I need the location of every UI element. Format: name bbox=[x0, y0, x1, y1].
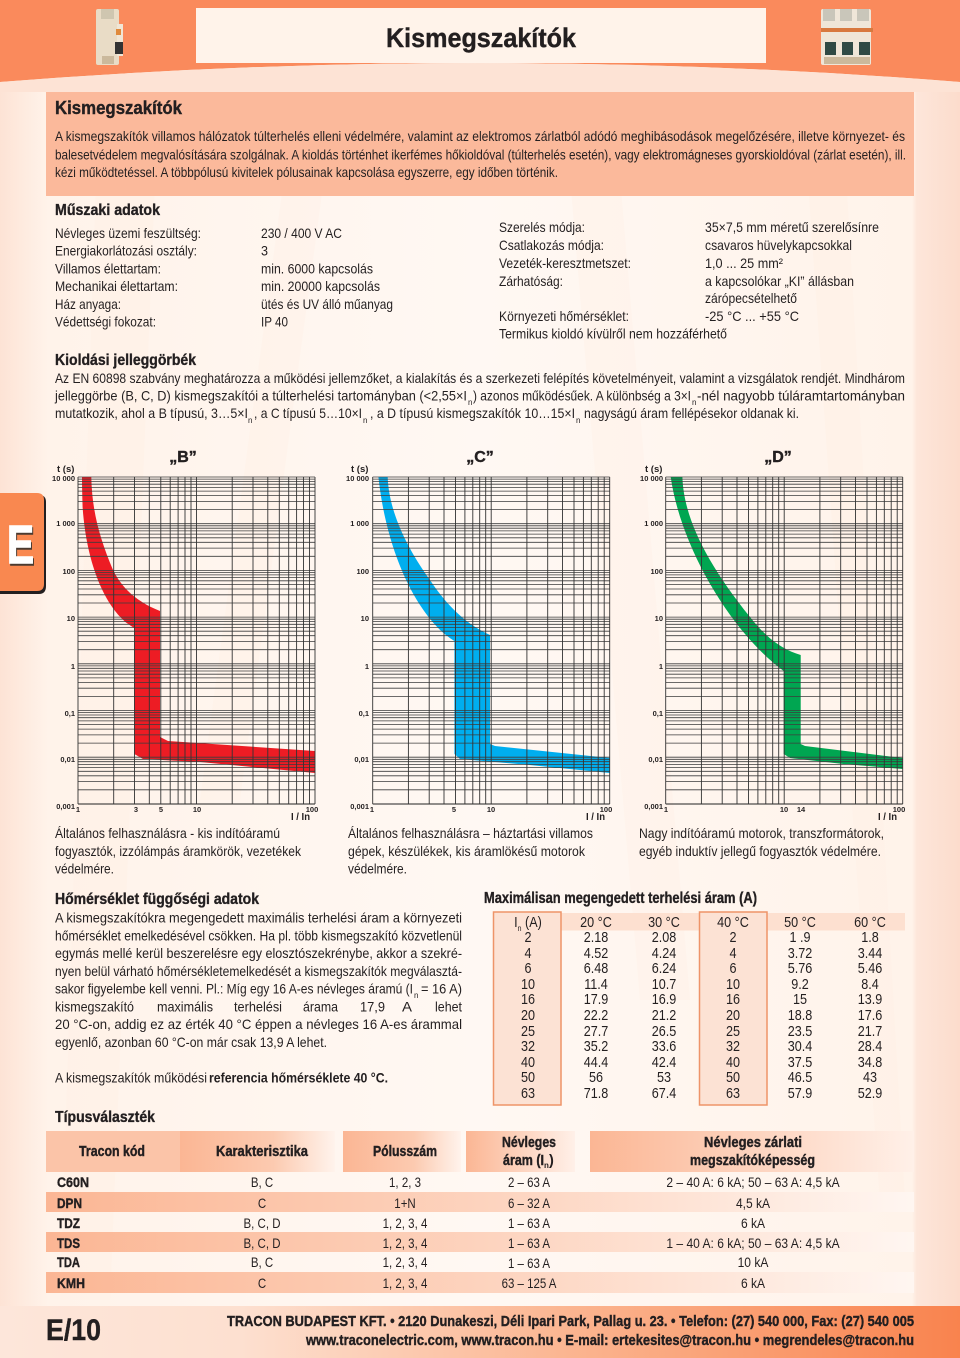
caption D bbox=[639, 825, 884, 859]
characteristic column: C bbox=[258, 1275, 266, 1291]
chart: C curve bbox=[346, 449, 612, 823]
chart: D curve: 14 bbox=[797, 805, 806, 814]
code column: TDZ bbox=[57, 1215, 80, 1231]
column 60 C: 13.9 bbox=[858, 991, 882, 1007]
column 30 C: 4.24 bbox=[652, 945, 677, 961]
caption C: Általános felhasználásra – háztartási villamos bbox=[348, 825, 593, 841]
breaking capacity column: 6 kA bbox=[741, 1275, 765, 1291]
column 40 C: 2 bbox=[729, 929, 737, 945]
column 40 C: 32 bbox=[726, 1038, 740, 1054]
column 20 C: 11.4 bbox=[584, 976, 608, 992]
column 60 C: 5.46 bbox=[858, 960, 882, 976]
column 50 C: 9.2 bbox=[791, 976, 809, 992]
column 40 C: 40 °C bbox=[717, 914, 749, 930]
column 20 C: 71.8 bbox=[584, 1085, 608, 1101]
technical data right: a kapcsolókar „KI” állásban bbox=[705, 273, 854, 289]
chart: C curve: 0,001 bbox=[350, 802, 369, 811]
table: type selection bbox=[46, 1131, 914, 1293]
rated current column: 6 – 32 A bbox=[508, 1195, 550, 1211]
temperature text: kismegszakító bbox=[55, 998, 134, 1014]
reference temperature note: A kismegszakítók működési bbox=[55, 1070, 207, 1086]
chart: C curve: 1 000 bbox=[350, 519, 369, 528]
technical data left: ütés és UV álló műanyag bbox=[261, 296, 393, 312]
table header: áram (I bbox=[503, 1153, 544, 1169]
column 50 C: 57.9 bbox=[788, 1085, 812, 1101]
caption B: védelmére. bbox=[55, 860, 114, 876]
column 60 C: 43 bbox=[863, 1069, 877, 1085]
trip curves text: -nél nagyobb túláramtartományban bbox=[697, 388, 905, 404]
breaking capacity column: 1 – 40 A: 6 kA; 50 – 63 A: 4,5 kA bbox=[666, 1235, 840, 1251]
heading: trip curves: Kioldási jelleggörbék bbox=[55, 352, 196, 369]
column In: 25 bbox=[521, 1023, 535, 1039]
heading: max load table: Maximálisan megengedett terhelési áram (A) bbox=[484, 890, 757, 907]
column 40 C: 4 bbox=[729, 945, 737, 961]
technical data left: Ház anyaga: bbox=[55, 296, 121, 312]
heading: temperature data: Hőmérséklet függőségi adatok bbox=[55, 891, 259, 908]
column 20 C: 35.2 bbox=[584, 1038, 608, 1054]
code column: DPN bbox=[57, 1195, 82, 1211]
pole column bbox=[383, 1174, 427, 1291]
icon: three pole breaker bbox=[821, 9, 873, 65]
technical data right: zárópecsételhető bbox=[705, 290, 797, 306]
characteristic column bbox=[244, 1174, 280, 1291]
red trip band bbox=[82, 477, 315, 773]
pole column: 1, 2, 3 bbox=[389, 1174, 421, 1190]
column 40 C: 16 bbox=[726, 991, 740, 1007]
chart: D curve bbox=[640, 449, 905, 823]
technical data left: Mechanikai élettartam: bbox=[55, 278, 178, 294]
chart title C: „C” bbox=[466, 449, 494, 466]
column 50 C: 18.8 bbox=[788, 1007, 812, 1023]
column 60 C: 3.44 bbox=[858, 945, 883, 961]
column 20 C: 20 °C bbox=[580, 914, 612, 930]
caption D: Nagy indítóáramú motorok, transzformátorok, bbox=[639, 825, 884, 841]
column In: I bbox=[514, 914, 518, 930]
column In: 6 bbox=[524, 960, 532, 976]
table header: megszakítóképesség bbox=[690, 1153, 815, 1169]
column 60 C: 28.4 bbox=[858, 1038, 883, 1054]
reference temperature note bbox=[55, 1070, 388, 1086]
chart: D curve: 100 bbox=[650, 567, 663, 576]
temperature text bbox=[55, 910, 462, 1050]
breaking capacity column bbox=[666, 1174, 840, 1291]
temperature text: n bbox=[414, 991, 418, 1000]
technical data left: Névleges üzemi feszültség: bbox=[55, 225, 201, 241]
column 30 C: 2.08 bbox=[652, 929, 676, 945]
introduction text bbox=[55, 128, 906, 180]
caption C: gépek, készülékek, kis áramlökésű motorok bbox=[348, 843, 586, 859]
chart: B curve: 5 bbox=[159, 805, 163, 814]
rated current column: 63 – 125 A bbox=[502, 1275, 557, 1291]
temperature text: sakor figyelembe kell venni. Pl.: Míg egy 16 A-es névleges áramú (I bbox=[55, 980, 413, 996]
technical data right: Környezeti hőmérséklet: bbox=[499, 308, 629, 324]
chart: B curve: 100 bbox=[62, 567, 75, 576]
chart: D curve: I / In bbox=[878, 812, 897, 823]
technical data left: IP 40 bbox=[261, 314, 288, 330]
column 20 C: 4.52 bbox=[584, 945, 608, 961]
rated current column: 1 – 63 A bbox=[508, 1215, 550, 1231]
column 60 C: 8.4 bbox=[861, 976, 879, 992]
green trip band bbox=[671, 477, 903, 769]
chart: B curve bbox=[52, 449, 318, 823]
column 30 C: 16.9 bbox=[652, 991, 676, 1007]
column 50 C: 50 °C bbox=[784, 914, 816, 930]
rated current column: 1 – 63 A bbox=[508, 1255, 550, 1271]
temperature text: A bbox=[402, 998, 413, 1014]
trip curves text: n bbox=[363, 416, 367, 425]
chart: D curve: 0,001 bbox=[644, 802, 663, 811]
chart: D curve: 1 bbox=[659, 662, 663, 671]
column In bbox=[514, 914, 542, 1101]
chart: C curve: 0,1 bbox=[359, 709, 369, 718]
chart: C curve: 100 bbox=[600, 805, 612, 814]
table header: Névleges zárlati bbox=[704, 1135, 802, 1151]
chart title B: „B” bbox=[169, 449, 197, 466]
technical data right: Zárhatóság: bbox=[499, 273, 563, 289]
technical data right: Termikus kioldó kívülről nem hozzáférhető bbox=[499, 326, 727, 342]
temperature text: árama bbox=[303, 998, 338, 1014]
footer contact text bbox=[227, 1314, 914, 1349]
temperature text: = 16 A) bbox=[421, 980, 462, 996]
column 30 C: 42.4 bbox=[652, 1054, 677, 1070]
characteristic column: B, C, D bbox=[244, 1215, 280, 1231]
temperature text: 17,9 bbox=[360, 998, 385, 1014]
column 40 C: 63 bbox=[726, 1085, 740, 1101]
icon: section tab E bbox=[0, 493, 46, 594]
chart title D: „D” bbox=[764, 449, 792, 466]
title: Kismegszakítók bbox=[386, 23, 577, 53]
pole column: 1, 2, 3, 4 bbox=[383, 1275, 427, 1291]
technical data left: Védettségi fokozat: bbox=[55, 314, 156, 330]
reference temperature note: referencia hőmérséklete 40 °C. bbox=[209, 1070, 388, 1086]
heading: type selection: Típusválaszték bbox=[55, 1109, 155, 1126]
column 50 C: 5.76 bbox=[788, 960, 812, 976]
technical data right: Szerelés módja: bbox=[499, 219, 585, 235]
column 20 C bbox=[580, 914, 612, 1101]
chart: D curve: 10 bbox=[780, 805, 788, 814]
temperature text: A kismegszakítókra megengedett maximális terhelési áram a környezeti bbox=[55, 910, 462, 926]
icon: single pole breaker bbox=[96, 9, 123, 65]
column 40 C bbox=[717, 914, 749, 1101]
chart: C curve: 1 bbox=[365, 662, 369, 671]
column 50 C: 37.5 bbox=[788, 1054, 812, 1070]
chart: C curve: 0,01 bbox=[354, 755, 369, 764]
chart: D curve: 0,1 bbox=[653, 709, 663, 718]
column In: n bbox=[518, 924, 522, 933]
blue trip band bbox=[378, 477, 610, 773]
column 40 C: 50 bbox=[726, 1069, 740, 1085]
column 20 C: 17.9 bbox=[584, 991, 608, 1007]
column 40 C: 20 bbox=[726, 1007, 740, 1023]
caption D: egyéb induktív jellegű fogyasztók védelmére. bbox=[639, 843, 881, 859]
table header: n bbox=[544, 1161, 549, 1170]
temperature text: egyenlő, azonban 60 °C-on már csak 13,9 A lehet. bbox=[55, 1034, 327, 1050]
column 20 C: 27.7 bbox=[584, 1023, 608, 1039]
characteristic column: B, C, D bbox=[244, 1235, 280, 1251]
technical data right: csavaros hüvelykapcsokkal bbox=[705, 237, 852, 253]
rated current column: 2 – 63 A bbox=[508, 1174, 550, 1190]
footer band bbox=[0, 1306, 960, 1358]
caption C bbox=[348, 825, 593, 876]
heading: technical data: Műszaki adatok bbox=[55, 202, 160, 219]
icon: section tab E: E bbox=[7, 515, 34, 575]
chart: B curve: 0,001 bbox=[56, 802, 75, 811]
column 30 C: 26.5 bbox=[652, 1023, 676, 1039]
trip curves text: ) azonos működésűek. A különbség a 3×I bbox=[473, 388, 691, 404]
column In: 32 bbox=[521, 1038, 535, 1054]
characteristic column: B, C bbox=[251, 1254, 273, 1270]
chart: C curve: 10 bbox=[487, 805, 495, 814]
column 30 C: 33.6 bbox=[652, 1038, 676, 1054]
technical data left: 230 / 400 V AC bbox=[261, 225, 342, 241]
chart: C curve: t (s) bbox=[351, 464, 368, 475]
chart: D curve: 0,01 bbox=[648, 755, 663, 764]
chart: B curve: 10 bbox=[67, 614, 75, 623]
trip curves text: n bbox=[468, 398, 472, 407]
chart: B curve: 3 bbox=[134, 805, 138, 814]
caption C: védelmére. bbox=[348, 860, 407, 876]
trip curves text: nagyságú áram fellépésekor oldanak ki. bbox=[584, 405, 799, 421]
table header: Névleges bbox=[502, 1135, 556, 1151]
rated current column: 1 – 63 A bbox=[508, 1235, 550, 1251]
column In: 4 bbox=[524, 945, 532, 961]
trip curves text: n bbox=[692, 398, 696, 407]
trip curves text bbox=[54, 370, 905, 425]
column 50 C: 3.72 bbox=[788, 945, 812, 961]
technical data right: 35×7,5 mm méretű szerelősínre bbox=[705, 219, 879, 235]
column In: 63 bbox=[521, 1085, 535, 1101]
chart: D curve: 1 bbox=[664, 805, 668, 814]
chart: B curve: 0,1 bbox=[65, 709, 75, 718]
column 30 C: 53 bbox=[657, 1069, 671, 1085]
chart: D curve: 100 bbox=[893, 805, 905, 814]
caption B: Általános felhasználásra - kis indítóáramú bbox=[55, 825, 280, 841]
temperature text: 20 °C-on, addig ez az érték 40 °C éppen a névleges 16 A-es árammal bbox=[55, 1016, 462, 1032]
column 50 C: 15 bbox=[793, 991, 807, 1007]
table header bbox=[46, 1131, 914, 1172]
chart: C curve: 10 000 bbox=[346, 474, 369, 483]
chart: D curve: 10 000 bbox=[640, 474, 663, 483]
chart: B curve: 1 000 bbox=[56, 519, 75, 528]
caption B bbox=[55, 825, 302, 876]
pole column: 1+N bbox=[394, 1195, 416, 1211]
technical data right: -25 °C ... +55 °C bbox=[705, 308, 799, 324]
pole column: 1, 2, 3, 4 bbox=[383, 1215, 427, 1231]
column 60 C: 34.8 bbox=[858, 1054, 882, 1070]
breaking capacity column: 6 kA bbox=[741, 1215, 765, 1231]
chart: B curve: 0,01 bbox=[60, 755, 75, 764]
introduction text: kézi működtetéssel. A többpólusú kivitelek pólusainak kapcsolása egyszerre, egy időben történik. bbox=[55, 164, 558, 180]
chart: B curve: I / In bbox=[291, 812, 310, 823]
column 60 C bbox=[854, 914, 886, 1101]
column 30 C: 30 °C bbox=[648, 914, 680, 930]
column 50 C: 1 .9 bbox=[789, 929, 811, 945]
breaking capacity column: 2 – 40 A: 6 kA; 50 – 63 A: 4,5 kA bbox=[666, 1174, 840, 1190]
column 60 C: 60 °C bbox=[854, 914, 886, 930]
trip curves text: , a C típusú 5…10×I bbox=[254, 405, 362, 421]
chart: B curve: 1 bbox=[76, 805, 80, 814]
technical data left: 3 bbox=[261, 242, 268, 258]
column 40 C: 40 bbox=[726, 1054, 740, 1070]
column 30 C: 67.4 bbox=[652, 1085, 677, 1101]
column In: 20 bbox=[521, 1007, 535, 1023]
column 50 C bbox=[784, 914, 816, 1101]
trip curves text: jelleggörbe (B, C, D) kismegszakítói a túlterhelési tartományban (<2,55×I bbox=[54, 388, 467, 404]
technical data right: Csatlakozás módja: bbox=[499, 237, 604, 253]
technical data left: min. 20000 kapcsolás bbox=[261, 278, 380, 294]
column 50 C: 23.5 bbox=[788, 1023, 812, 1039]
column 20 C: 56 bbox=[589, 1069, 603, 1085]
column In: 50 bbox=[521, 1069, 535, 1085]
code column: C60N bbox=[57, 1174, 89, 1190]
technical data left: Energiakorlátozási osztály: bbox=[55, 242, 197, 258]
column 60 C: 52.9 bbox=[858, 1085, 882, 1101]
column 20 C: 22.2 bbox=[584, 1007, 608, 1023]
table header: ) bbox=[549, 1153, 554, 1169]
column 60 C: 21.7 bbox=[858, 1023, 882, 1039]
pole column: 1, 2, 3, 4 bbox=[383, 1254, 427, 1270]
page number: E/10 bbox=[46, 1314, 101, 1347]
temperature text: lehet bbox=[435, 998, 462, 1014]
column 50 C: 46.5 bbox=[788, 1069, 812, 1085]
column In: 40 bbox=[521, 1054, 535, 1070]
breaking capacity column: 10 kA bbox=[738, 1254, 769, 1270]
characteristic column: B, C bbox=[251, 1174, 273, 1190]
chart: B curve: 100 bbox=[306, 805, 318, 814]
characteristic column: C bbox=[258, 1195, 266, 1211]
caption B: fogyasztók, izzólámpás áramkörök, vezetékek bbox=[55, 843, 302, 859]
column 50 C: 30.4 bbox=[788, 1038, 813, 1054]
panel: introduction bbox=[46, 92, 914, 196]
icon: section tab E: E bbox=[8, 517, 35, 577]
technical data left bbox=[55, 225, 393, 330]
chart: C curve: 10 bbox=[361, 614, 369, 623]
trip curves text: mutatkozik, ahol a B típusú, 3…5×I bbox=[55, 405, 248, 421]
column 60 C: 17.6 bbox=[858, 1007, 882, 1023]
column 20 C: 2.18 bbox=[584, 929, 608, 945]
technical data left: Villamos élettartam: bbox=[55, 260, 161, 276]
trip curves text: n bbox=[576, 416, 580, 425]
rated current column bbox=[502, 1174, 557, 1291]
technical data left: min. 6000 kapcsolás bbox=[261, 260, 373, 276]
chart: C curve: 1 bbox=[370, 805, 374, 814]
chart: D curve: t (s) bbox=[645, 464, 662, 475]
column In: 10 bbox=[521, 976, 535, 992]
header band bbox=[0, 0, 960, 92]
table: max load current bbox=[493, 912, 905, 1105]
code column: TDS bbox=[57, 1235, 80, 1251]
temperature text: egymás mellé kerül beszerelésre egy elosztószekrénybe, akkor a szekré- bbox=[55, 945, 462, 961]
technical data right: Vezeték-keresztmetszet: bbox=[499, 255, 631, 271]
column 40 C: 10 bbox=[726, 976, 740, 992]
technical data right: 1,0 ... 25 mm² bbox=[705, 255, 783, 271]
table header: Pólusszám bbox=[373, 1144, 437, 1160]
column 30 C bbox=[648, 914, 680, 1101]
code column bbox=[57, 1174, 89, 1291]
column 30 C: 6.24 bbox=[652, 960, 677, 976]
chart: B curve: 10 bbox=[193, 805, 201, 814]
temperature text: maximális bbox=[157, 998, 213, 1014]
panel heading: Kismegszakítók bbox=[55, 98, 183, 118]
column 20 C: 6.48 bbox=[584, 960, 608, 976]
column In: 2 bbox=[524, 929, 532, 945]
column 40 C: 25 bbox=[726, 1023, 740, 1039]
chart: B curve: t (s) bbox=[57, 464, 74, 475]
column 30 C: 10.7 bbox=[652, 976, 676, 992]
column 30 C: 21.2 bbox=[652, 1007, 676, 1023]
chart: C curve: I / In bbox=[586, 812, 605, 823]
column In: 16 bbox=[521, 991, 535, 1007]
column 60 C: 1.8 bbox=[861, 929, 879, 945]
column 20 C: 44.4 bbox=[584, 1054, 609, 1070]
temperature text: terhelési bbox=[234, 998, 282, 1014]
breaking capacity column: 4,5 kA bbox=[736, 1195, 770, 1211]
temperature text: hőmérséklet emelkedésével csökken. Ha pl. több kismegszakító közvetlenül bbox=[55, 928, 462, 944]
chart: C curve: 100 bbox=[356, 567, 369, 576]
chart: B curve: 1 bbox=[71, 662, 75, 671]
column In: (A) bbox=[522, 914, 542, 930]
chart: D curve: 1 000 bbox=[644, 519, 663, 528]
table header: Tracon kód bbox=[79, 1144, 145, 1160]
technical data right bbox=[499, 219, 879, 342]
title box bbox=[196, 8, 766, 63]
pole column: 1, 2, 3, 4 bbox=[383, 1235, 427, 1251]
temperature text: nyen belül várható hőmérsékletemelkedését a kismegszakítók megválasztá- bbox=[55, 963, 462, 979]
chart: C curve: 5 bbox=[452, 805, 456, 814]
table header: Karakterisztika bbox=[216, 1144, 309, 1160]
column 40 C: 6 bbox=[729, 960, 737, 976]
trip curves text: , a D típusú kismegszakítók 10…15×I bbox=[370, 405, 575, 421]
code column: KMH bbox=[57, 1275, 85, 1291]
chart: D curve: 10 bbox=[655, 614, 663, 623]
trip curves text: n bbox=[248, 416, 252, 425]
chart: B curve: 10 000 bbox=[52, 474, 75, 483]
row stripes bbox=[46, 1192, 914, 1293]
code column: TDA bbox=[57, 1254, 80, 1270]
